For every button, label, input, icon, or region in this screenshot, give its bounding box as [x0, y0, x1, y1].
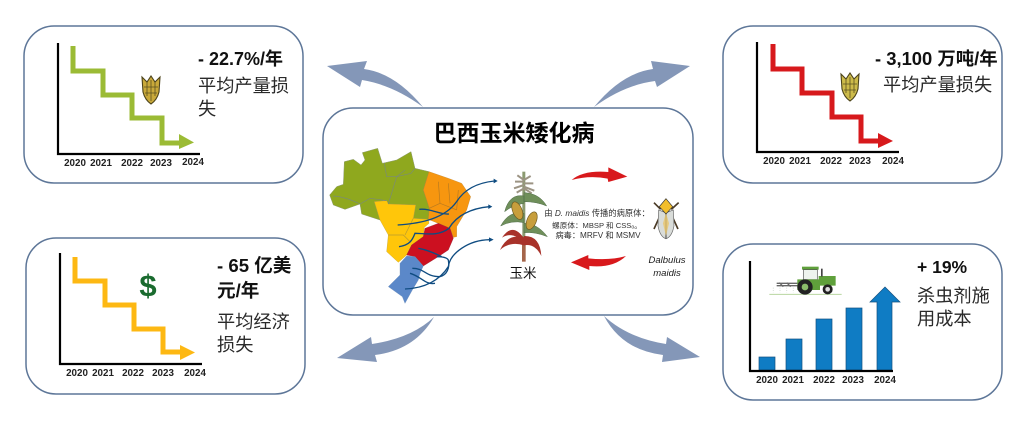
stat text: 损失: [217, 335, 253, 355]
illustration: corn plant: [500, 172, 547, 262]
year labels: 2023: [150, 158, 172, 169]
year labels: 2023: [842, 375, 864, 386]
step-down line: red: [773, 44, 893, 148]
state borders: [333, 163, 458, 242]
stat text: - 3,100 万吨/年: [875, 48, 998, 69]
stat text: 平均产量损: [198, 76, 289, 96]
year labels: 2021: [782, 375, 804, 386]
region: north: [330, 148, 429, 220]
label: Dalbulus maidis: maidis: [653, 268, 681, 279]
map: Brazil regions: [330, 148, 498, 303]
label: Dalbulus maidis: Dalbulus: [649, 255, 686, 266]
year labels: 2021: [92, 368, 114, 379]
year labels: 2022: [122, 368, 144, 379]
panel: central disease summary: [323, 108, 693, 315]
rising arrow: [870, 287, 900, 370]
year labels: [66, 368, 206, 379]
icon: corn cob: [142, 76, 160, 104]
region: centre-west: [374, 201, 429, 262]
year labels: 2024: [184, 368, 206, 379]
stat text: 用成本: [917, 309, 972, 329]
year labels: 2024: [874, 375, 896, 386]
stat text: 元/年: [217, 280, 259, 301]
pathogen text: 螺原体：MBSP 和 CSSₒ。: [552, 220, 642, 230]
year labels: 2021: [789, 156, 811, 167]
region: southeast: [407, 223, 453, 266]
year labels: 2022: [813, 375, 835, 386]
pathogen text: 病毒：MRFV 和 MSMV: [555, 230, 641, 240]
icon: dollar sign: $: [139, 268, 157, 303]
stat text: [217, 255, 292, 355]
panel: yield loss tonnes: [723, 26, 1002, 183]
arrow: centre to bottom-left panel: [337, 317, 434, 362]
bar chart: [759, 308, 862, 370]
year labels: 2022: [121, 158, 143, 169]
year labels: 2020: [763, 156, 785, 167]
year labels: [64, 157, 204, 169]
arrow: insect to corn: [571, 255, 626, 270]
panel: insecticide cost: [723, 244, 1002, 400]
chart axes: [750, 261, 893, 371]
stat text: 失: [198, 99, 216, 119]
panel: economic loss: [26, 238, 305, 394]
stat text: - 65 亿美: [217, 255, 292, 276]
year labels: 2023: [849, 156, 871, 167]
year labels: 2024: [182, 157, 204, 168]
panel: yield loss percent: [24, 26, 303, 183]
arrow: centre to bottom-right panel: [604, 316, 700, 362]
stat text: 杀虫剂施: [917, 286, 990, 306]
year labels: 2020: [66, 368, 88, 379]
year labels: [756, 375, 896, 386]
chart axes: [60, 253, 202, 364]
step-down line: green: [73, 46, 194, 149]
icon: tractor sprayer: [769, 267, 842, 295]
chart axes: [58, 43, 200, 154]
arrow: centre to top-right panel: [594, 61, 690, 107]
pathogen text: 由 D. maidis 传播的病原体：: [544, 208, 650, 218]
label: Dalbulus maidis: [649, 255, 686, 279]
year labels: 2023: [152, 368, 174, 379]
pathogen text: [544, 208, 650, 240]
stat text: + 19%: [917, 257, 968, 277]
stat text: - 22.7%/年: [198, 48, 283, 69]
label: corn: 玉米: [510, 266, 537, 281]
arrow: centre to top-left panel: [327, 61, 423, 107]
year labels: [763, 156, 904, 167]
year labels: 2021: [90, 158, 112, 169]
illustration: leafhopper insect: [654, 199, 679, 239]
region: south: [388, 256, 423, 303]
region: northeast: [423, 172, 471, 237]
step-down line: yellow: [75, 257, 195, 360]
flow lines to corn: [398, 181, 494, 289]
stat text: [917, 257, 990, 329]
year labels: 2020: [64, 158, 86, 169]
year labels: 2024: [882, 156, 904, 167]
icon: corn cob: [841, 73, 859, 101]
stat text: 平均产量损失: [883, 75, 992, 95]
year labels: 2022: [820, 156, 842, 167]
chart axes: [757, 42, 899, 152]
stat text: [875, 48, 998, 95]
title: 巴西玉米矮化病: [434, 120, 594, 146]
arrow: corn to insect: [572, 167, 627, 182]
stat text: 平均经济: [217, 312, 290, 332]
year labels: 2020: [756, 375, 778, 386]
stat text: [198, 48, 289, 119]
